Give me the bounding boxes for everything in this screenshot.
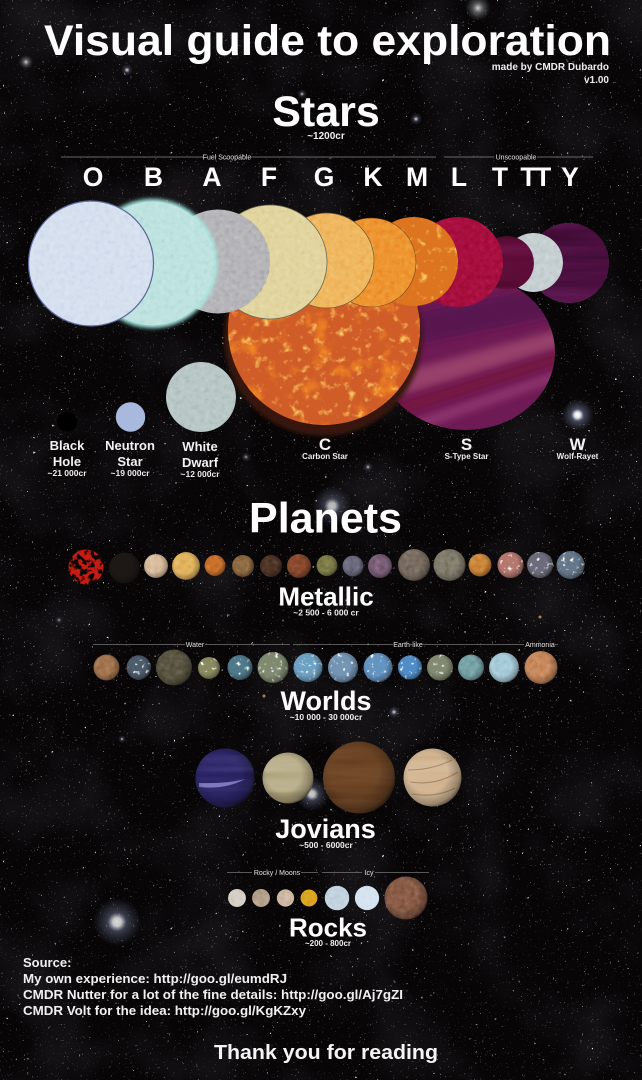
jovians price: ~500 - 6000cr xyxy=(299,840,354,850)
brackets: water, earth-like, ammonia xyxy=(93,642,558,649)
label: S type star: S xyxy=(461,435,472,454)
credit: author: made by CMDR Dubardo xyxy=(492,62,609,73)
star: W wolf-rayet: Wolf-Rayet xyxy=(557,452,599,461)
credit: version: v1.00 xyxy=(584,75,609,86)
heading: Metallic: Metallic xyxy=(278,582,374,612)
star: G xyxy=(279,213,374,308)
star: B xyxy=(88,199,217,328)
planet: purple jovian xyxy=(196,748,254,808)
neutron star xyxy=(105,402,155,478)
black hole: ~21 000cr xyxy=(48,468,87,478)
stars price: ~1200cr xyxy=(307,131,345,142)
neutron star: Star xyxy=(117,454,143,469)
star class letters: K xyxy=(363,162,383,192)
star: O xyxy=(28,201,154,326)
star class letters: O xyxy=(83,162,103,192)
star class letters: B xyxy=(144,162,163,192)
star class letters: TT xyxy=(520,162,551,192)
star: C carbon xyxy=(224,233,422,436)
star: S type xyxy=(396,287,555,430)
white dwarf: White xyxy=(182,439,218,454)
label: C carbon star: C xyxy=(319,435,331,454)
star: T dark xyxy=(480,236,534,290)
star class letters: A xyxy=(202,162,222,192)
star: A xyxy=(166,210,270,314)
planet: tan jovian xyxy=(262,752,314,804)
star: K xyxy=(327,218,416,307)
heading: Jovians: Jovians xyxy=(275,814,376,844)
brackets: water, earth-like, ammonia: Earth-like xyxy=(393,642,423,649)
heading: Planets: Planets xyxy=(249,494,402,542)
sources text block: My own experience: http://goo.gl/eumdRJ xyxy=(23,971,287,986)
white dwarf: ~12 000cr xyxy=(180,469,220,479)
label: C carbon star xyxy=(302,435,348,461)
star class letters xyxy=(83,162,579,192)
star: W wolf-rayet: W xyxy=(569,435,586,454)
neutron star: ~19 000cr xyxy=(110,468,150,478)
brackets: water, earth-like, ammonia: Ammonia xyxy=(525,642,555,649)
white dwarf xyxy=(166,362,236,479)
worlds price: ~10 000 - 30 000cr xyxy=(290,712,363,722)
star class letters: L xyxy=(451,162,467,192)
rocks price: ~200 - 800cr xyxy=(305,939,351,948)
planet: beige jovian xyxy=(404,748,462,806)
black hole xyxy=(48,412,87,478)
sources text block: CMDR Volt for the idea: http://goo.gl/KgKZxy xyxy=(23,1003,307,1018)
star: W wolf-rayet xyxy=(557,399,599,461)
planet: brown jovian xyxy=(323,742,395,814)
brackets: rocky moons, icy: Icy xyxy=(365,870,374,877)
star: Y xyxy=(529,223,609,303)
white dwarf: Dwarf xyxy=(182,455,219,470)
sources text block: Source: xyxy=(23,955,71,970)
brackets: water, earth-like, ammonia: Water xyxy=(186,642,205,649)
planet row: worlds xyxy=(94,650,558,686)
bracket: unscoopable: Unscoopable xyxy=(496,154,537,162)
star class letters: T xyxy=(492,162,508,192)
star class letters: G xyxy=(314,162,334,192)
sources text block xyxy=(23,955,403,1018)
heading: Rocks: Rocks xyxy=(289,912,367,942)
sources text block: CMDR Nutter for a lot of the fine details: http://goo.gl/Aj7gZI xyxy=(23,987,403,1002)
metallic price: ~2 500 - 6 000 cr xyxy=(293,608,359,618)
heading: Worlds: Worlds xyxy=(280,686,372,716)
bracket: fuel scoopable: Fuel Scoopable xyxy=(203,154,251,162)
planet row: rocks xyxy=(228,876,428,920)
star class letters: Y xyxy=(561,162,579,192)
title: Visual guide to exploration xyxy=(44,17,611,65)
closing line: Thank you for reading xyxy=(214,1042,438,1064)
label: C carbon star: Carbon Star xyxy=(302,452,348,461)
label: S type star xyxy=(445,435,488,461)
neutron star: Neutron xyxy=(105,438,155,453)
star: L xyxy=(413,217,503,307)
brackets: rocky moons, icy xyxy=(227,870,429,877)
brackets: rocky moons, icy: Rocky / Moons xyxy=(254,870,301,877)
star: F xyxy=(213,205,327,319)
star class letters: F xyxy=(261,162,277,192)
black hole: Hole xyxy=(53,454,81,469)
star class letters: M xyxy=(406,162,428,192)
black hole: Black xyxy=(50,438,85,453)
star: M xyxy=(369,217,458,306)
heading: Stars: Stars xyxy=(272,88,380,136)
label: S type star: S-Type Star xyxy=(445,452,488,461)
planet row: metallic xyxy=(68,549,584,584)
star: T light xyxy=(504,233,563,292)
